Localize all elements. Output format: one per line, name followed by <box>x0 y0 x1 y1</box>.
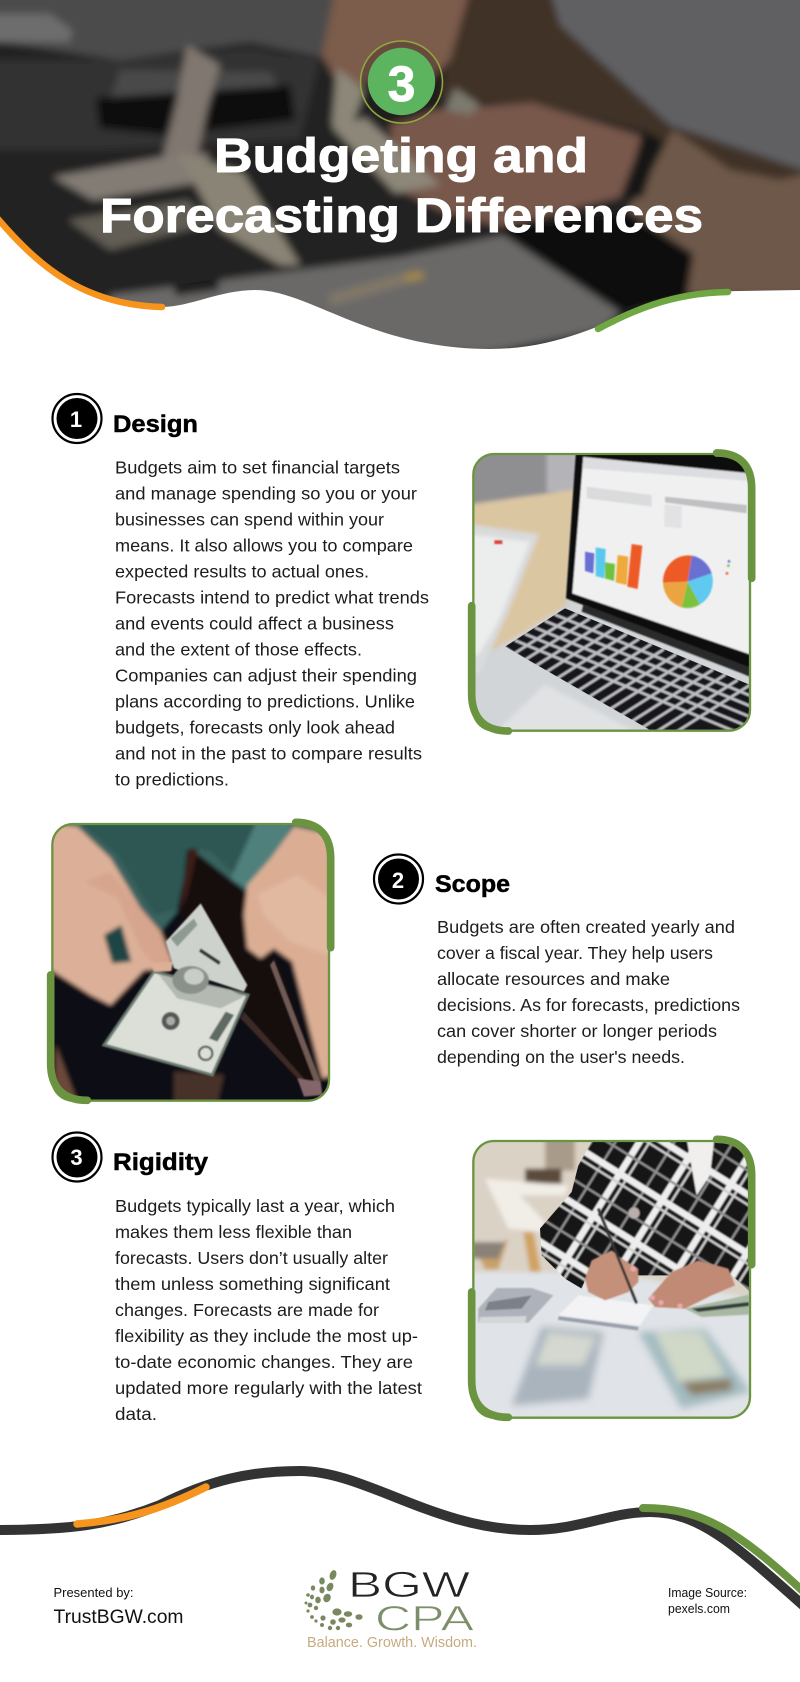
body text: design: expected results to actual ones. <box>115 562 369 582</box>
footer text: image source: Image Source: <box>668 1586 747 1600</box>
image frame <box>472 1139 752 1418</box>
icon: number 2 <box>374 854 423 904</box>
section 2: scope <box>49 820 740 1104</box>
keyboard <box>505 608 749 730</box>
logo tagline: Balance. Growth. Wisdom. <box>307 1634 477 1651</box>
footer text: presented by: Presented by: <box>54 1585 134 1600</box>
photo: woman writing with money on table <box>470 1137 755 1421</box>
logo mark: dots <box>304 1569 363 1630</box>
body text: rigidity: updated more regularly with the latest <box>115 1378 422 1398</box>
body text: design: Forecasts intend to predict what trends <box>115 588 429 608</box>
footer wave: dark line <box>0 1471 800 1607</box>
title: Budgeting and <box>214 130 588 183</box>
body text: rigidity: Budgets typically last a year, which <box>115 1196 395 1216</box>
body text: scope: depending on the user's needs. <box>437 1047 685 1067</box>
body text: design: to predictions. <box>115 770 229 790</box>
body text: design <box>115 458 429 790</box>
section 3: rigidity <box>52 1132 755 1424</box>
icon: number 1: 1 <box>70 407 82 432</box>
body text: design: businesses can spend within your <box>115 510 384 530</box>
body text: scope: cover a fiscal year. They help users <box>437 943 713 963</box>
photo: wallet and dollar bill <box>49 820 333 1104</box>
footer accent: orange curve <box>77 1487 206 1524</box>
pie chart <box>663 555 730 608</box>
body text: rigidity: to-date economic changes. They are <box>115 1352 413 1372</box>
body text: scope: decisions. As for forecasts, predictions <box>437 995 740 1015</box>
bar chart <box>585 544 642 589</box>
badge: number 3: 3 <box>388 56 415 112</box>
body text: scope: allocate resources and make <box>437 969 670 989</box>
footer text: presented by <box>54 1585 184 1628</box>
title <box>100 130 703 243</box>
title: Forecasting Differences <box>100 190 703 243</box>
body text: design: Companies can adjust their spending <box>115 666 417 686</box>
body text: rigidity: changes. Forecasts are made for <box>115 1300 379 1320</box>
image frame <box>51 822 331 1101</box>
body text: design: and not in the past to compare results <box>115 744 422 764</box>
footer text: image source: pexels.com <box>668 1602 730 1616</box>
body text: design: plans according to predictions. Unlike <box>115 692 415 712</box>
badge: number 3 <box>360 41 442 123</box>
body text: design: Budgets aim to set financial targets <box>115 458 400 478</box>
body text: scope: can cover shorter or longer periods <box>437 1021 717 1041</box>
body text: design: and events could affect a business <box>115 614 394 634</box>
body text: design: budgets, forecasts only look ahead <box>115 718 395 738</box>
icon: number 1 <box>52 394 102 443</box>
logo: BGW CPA <box>304 1564 477 1651</box>
icon: number 2: 2 <box>392 868 404 893</box>
header accent: orange curve <box>0 219 162 307</box>
body text: scope <box>437 917 740 1067</box>
header photo: hands counting money <box>0 0 800 360</box>
image frame <box>472 453 752 731</box>
jacket <box>540 1142 749 1291</box>
icon: number 3: 3 <box>70 1145 83 1170</box>
body text: rigidity: data. <box>115 1404 157 1424</box>
footer accent: green curve <box>643 1508 800 1593</box>
body text: rigidity: them unless something significant <box>115 1274 390 1294</box>
heading: design: Design <box>113 411 198 438</box>
header accent: green curve <box>598 292 728 329</box>
heading: rigidity: Rigidity <box>113 1149 208 1176</box>
body text: design: and manage spending so you or your <box>115 484 417 504</box>
footer text: presented by: TrustBGW.com <box>54 1606 184 1628</box>
footer text: image source <box>668 1586 747 1616</box>
heading: scope: Scope <box>435 871 510 898</box>
body text: rigidity: makes them less flexible than <box>115 1222 352 1242</box>
body text: scope: Budgets are often created yearly and <box>437 917 735 937</box>
header wave <box>0 220 800 362</box>
photo: laptop with charts <box>468 449 756 735</box>
body text: design: means. It also allows you to compare <box>115 536 413 556</box>
body text: rigidity: flexibility as they include the most up- <box>115 1326 418 1346</box>
body text: rigidity: forecasts. Users don’t usually alter <box>115 1248 388 1268</box>
logo text: BGW: BGW <box>348 1564 470 1605</box>
body text: rigidity <box>115 1196 422 1424</box>
body text: design: and the extent of those effects. <box>115 640 362 660</box>
logo text: CPA: CPA <box>375 1600 475 1638</box>
icon: number 3 <box>52 1132 102 1182</box>
section 1: design <box>52 394 800 790</box>
